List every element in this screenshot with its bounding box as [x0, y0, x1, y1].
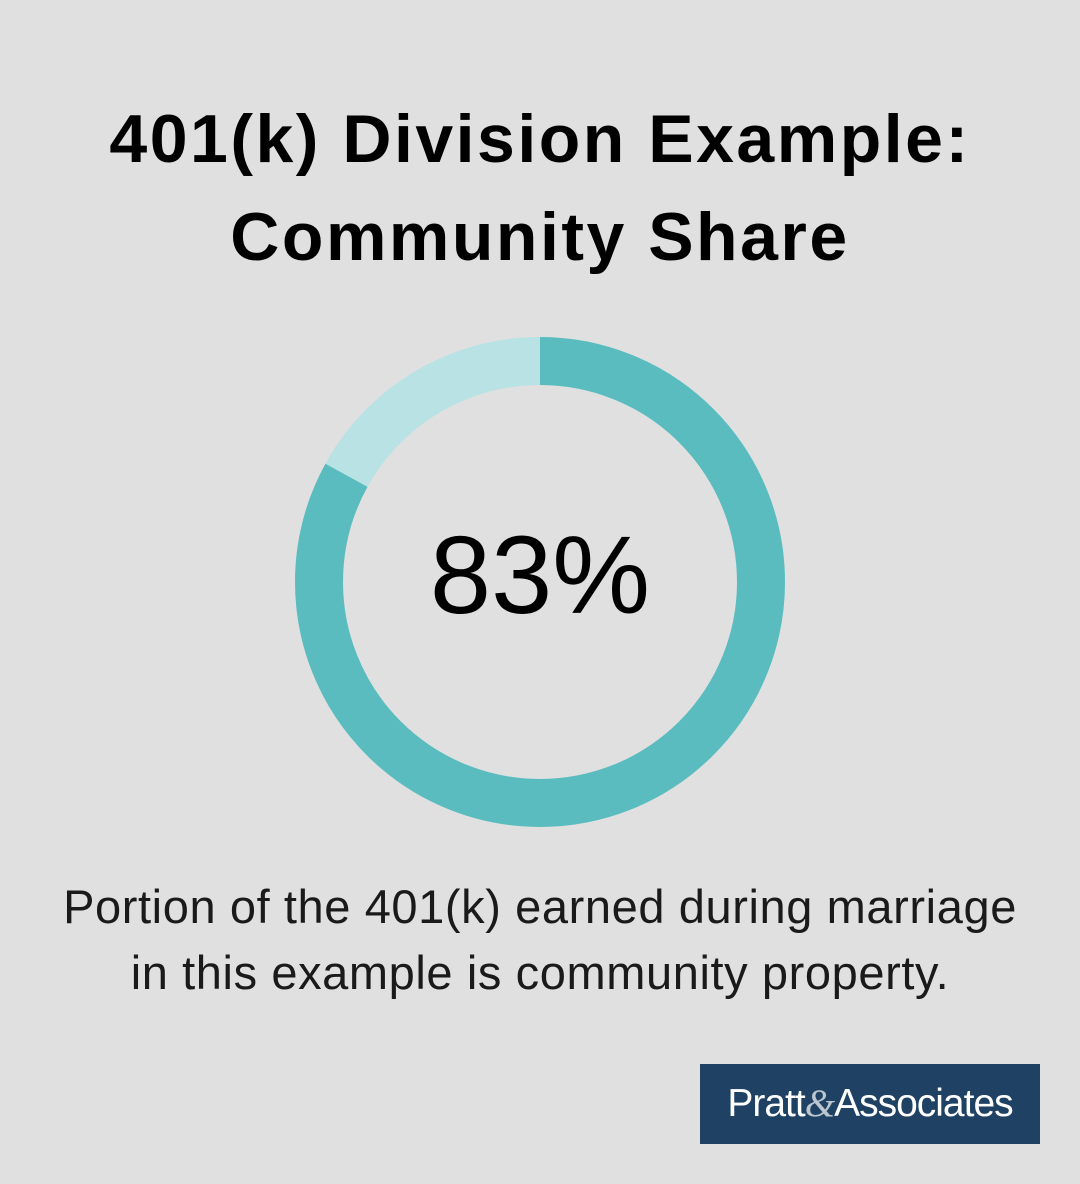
donut segment: community share 83%: [319, 361, 761, 803]
caption: [63, 880, 1017, 999]
caption: in this example is community property.: [131, 946, 949, 999]
title: Community Share: [230, 199, 850, 275]
center percentage: 83%: [430, 514, 650, 637]
title: 401(k) Division Example:: [109, 101, 971, 177]
title: [109, 101, 971, 275]
logo: Pratt&Associates: [727, 1082, 1013, 1125]
donut segment: remaining share (light): [319, 361, 761, 803]
logo: [700, 1064, 1040, 1144]
caption: Portion of the 401(k) earned during marriage: [63, 880, 1017, 933]
